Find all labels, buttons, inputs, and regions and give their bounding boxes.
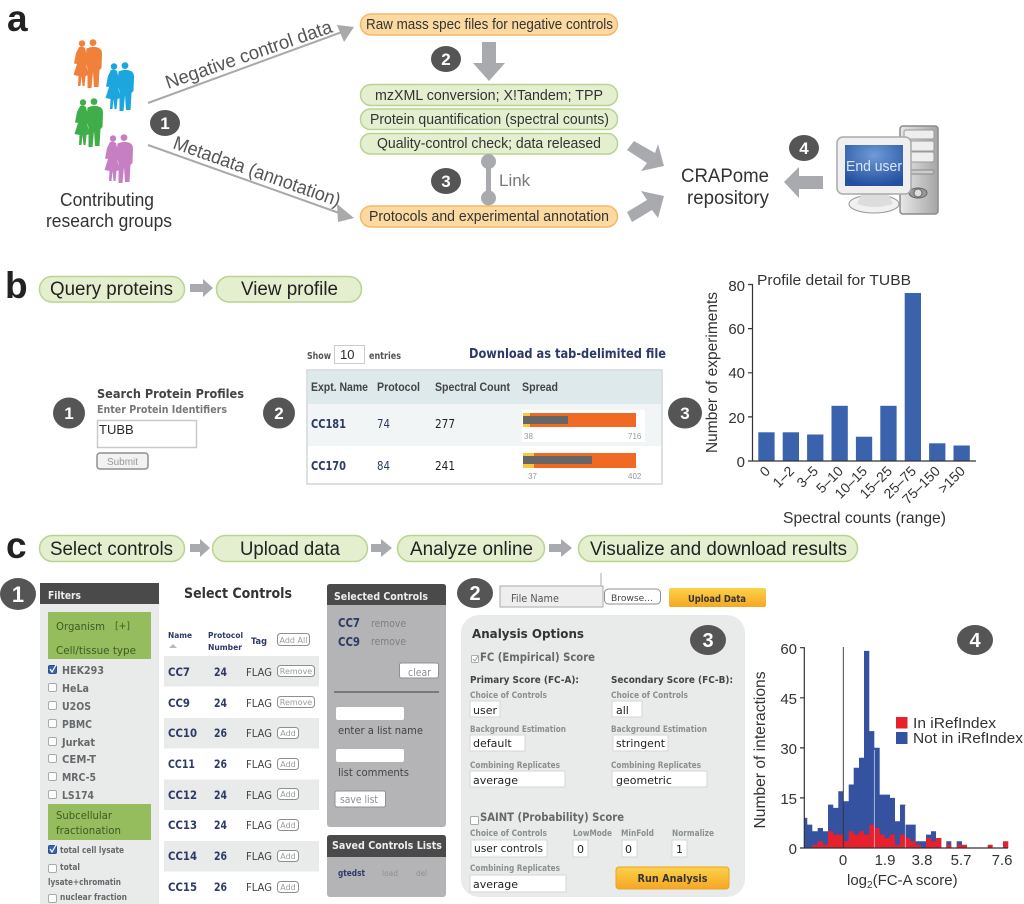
badge 1 bbox=[53, 398, 85, 428]
table: select controls: CC10 bbox=[168, 726, 197, 740]
badge 3 bbox=[668, 398, 702, 428]
panel: analysis options: Choice of Controls bbox=[611, 691, 688, 701]
panel: selected controls: CC7 bbox=[338, 616, 360, 630]
table: select controls: Protocol bbox=[208, 631, 243, 640]
bar chart: profile detail for TUBB: 0 bbox=[756, 463, 773, 480]
panel: analysis options: Combining Replicates bbox=[470, 761, 560, 771]
panel: analysis options: default bbox=[473, 737, 512, 750]
table: select controls: FLAG bbox=[246, 850, 272, 863]
badge 1 bbox=[0, 578, 36, 610]
badge 4: 4 bbox=[799, 139, 809, 158]
results table: CC170 bbox=[311, 459, 346, 473]
badge 2 bbox=[457, 578, 493, 608]
bar chart: profile detail for TUBB bbox=[704, 272, 976, 527]
arrow: metadata annotation: Metadata (annotation) bbox=[170, 133, 343, 211]
table: select controls: 24 bbox=[214, 665, 227, 679]
table: select controls: Name bbox=[168, 631, 193, 640]
histogram: FC-A score distribution bbox=[752, 641, 1024, 891]
table: select controls: 26 bbox=[214, 757, 227, 771]
table: select controls: Add bbox=[280, 821, 296, 830]
table: select controls: FLAG bbox=[246, 758, 272, 771]
pill: upload data bbox=[212, 536, 368, 562]
histogram: FC-A score distribution: 0 bbox=[789, 841, 797, 858]
bar chart: profile detail for TUBB: Number of experiments bbox=[704, 292, 721, 453]
histogram: FC-A score distribution: 60 bbox=[780, 641, 797, 658]
search form: Enter Protein Identifiers bbox=[97, 404, 227, 416]
icon: computer end user bbox=[837, 126, 938, 214]
panel: selected controls: CC9 bbox=[338, 635, 360, 649]
table: select controls: FLAG bbox=[246, 697, 272, 710]
histogram: FC-A score distribution: 7.6 bbox=[992, 852, 1012, 869]
panel: filters: HeLa bbox=[62, 682, 89, 695]
panel: filters: PBMC bbox=[62, 718, 92, 731]
panel: filters bbox=[40, 583, 159, 904]
panel: filters: lysate+chromatin bbox=[48, 878, 121, 888]
bar chart: profile detail for TUBB: 10–15 bbox=[831, 463, 870, 502]
histogram: FC-A score distribution: Not in iRefIndex bbox=[913, 730, 1024, 747]
histogram: FC-A score distribution: 1.9 bbox=[875, 852, 895, 869]
panel: analysis options: Combining Replicates bbox=[470, 864, 560, 874]
badge 4: 4 bbox=[969, 630, 981, 652]
results table: 241 bbox=[435, 459, 455, 473]
bar chart: profile detail for TUBB: 25–75 bbox=[880, 463, 919, 502]
file upload controls bbox=[500, 573, 766, 607]
pill: protocols and experimental annotation: Protocols and experimental annotation bbox=[369, 209, 609, 225]
badge 2 bbox=[431, 46, 461, 72]
table: select controls: 26 bbox=[214, 726, 227, 740]
badge 3: 3 bbox=[680, 404, 690, 423]
panel: analysis options: 0 bbox=[625, 843, 632, 856]
histogram: FC-A score distribution: 45 bbox=[780, 691, 797, 708]
table: select controls bbox=[164, 586, 319, 894]
bar chart: profile detail for TUBB: 0 bbox=[737, 454, 745, 471]
results table: 84 bbox=[377, 459, 390, 473]
bar chart: profile detail for TUBB: >150 bbox=[935, 463, 968, 496]
link connector bbox=[481, 154, 531, 206]
histogram: FC-A score distribution: 2 bbox=[867, 880, 873, 891]
badge 1: 1 bbox=[12, 582, 24, 607]
bar chart: profile detail for TUBB: Spectral counts (range) bbox=[783, 510, 946, 527]
panel: selected controls: remove bbox=[371, 618, 406, 630]
badge 3 bbox=[431, 168, 461, 194]
table: select controls: 24 bbox=[214, 696, 227, 710]
table: select controls: Add bbox=[280, 729, 296, 738]
panel: filters: Jurkat bbox=[61, 736, 95, 749]
panel: saved controls lists bbox=[327, 835, 446, 897]
panel: analysis options: SAINT (Probability) Score bbox=[480, 810, 624, 824]
pill: visualize and download results: Visualize and download results bbox=[590, 539, 847, 560]
icon: contributing research groups silhouettes bbox=[74, 39, 134, 183]
panel: analysis options: Normalize bbox=[672, 829, 714, 839]
table: select controls: 24 bbox=[214, 818, 227, 832]
results table: 38 bbox=[524, 432, 533, 441]
table: select controls: CC13 bbox=[168, 818, 197, 832]
results table: Spread bbox=[522, 382, 558, 394]
label: contributing research groups: research groups bbox=[46, 210, 172, 231]
panel: analysis options: Secondary Score (FC-B): bbox=[611, 675, 733, 686]
search form bbox=[97, 387, 244, 469]
panel: analysis options: stringent bbox=[616, 737, 666, 750]
badge 1: 1 bbox=[160, 114, 170, 133]
panel letter c: c bbox=[6, 525, 27, 566]
panel: saved controls lists: del bbox=[416, 869, 427, 878]
panel: filters: Cell/tissue type bbox=[56, 644, 136, 657]
panel: filters: nuclear fraction bbox=[60, 893, 127, 903]
panel c: analysis workflow bbox=[0, 525, 1024, 904]
file upload controls: Browse... bbox=[611, 594, 653, 604]
pill: view profile: View profile bbox=[241, 279, 338, 300]
pill: view profile bbox=[216, 276, 362, 302]
results table: entries bbox=[369, 351, 401, 362]
table: select controls: 26 bbox=[214, 880, 227, 894]
bar chart: profile detail for TUBB: 60 bbox=[728, 321, 745, 338]
file upload controls: Upload Data bbox=[688, 594, 746, 605]
arrow: query to view bbox=[190, 279, 213, 297]
table: select controls: FLAG bbox=[246, 789, 272, 802]
panel: selected controls: remove bbox=[371, 636, 406, 648]
pill: select controls bbox=[40, 536, 184, 562]
pill: raw mass spec files: Raw mass spec files for negative controls bbox=[366, 17, 613, 33]
panel: selected controls: list comments bbox=[338, 767, 409, 779]
histogram: FC-A score distribution: 30 bbox=[780, 741, 797, 758]
histogram: FC-A score distribution: 5.7 bbox=[951, 852, 971, 869]
arrow: negative control data: Negative control data bbox=[163, 17, 335, 94]
histogram: FC-A score distribution: 3.8 bbox=[912, 852, 932, 869]
panel: filters: LS174 bbox=[62, 789, 94, 802]
results table: 37 bbox=[528, 472, 537, 481]
panel: analysis options: Choice of Controls bbox=[470, 691, 547, 701]
panel: filters: total cell lysate bbox=[60, 846, 124, 856]
results table: 716 bbox=[628, 432, 642, 441]
arrow: select to upload bbox=[190, 539, 210, 557]
table: select controls: Select Controls bbox=[184, 586, 292, 602]
panel: filters: Organism bbox=[56, 620, 105, 633]
table: select controls: FLAG bbox=[246, 819, 272, 832]
table: select controls: 24 bbox=[214, 788, 227, 802]
arrow: analyze to visualize bbox=[549, 539, 572, 557]
panel: analysis options: FC (Empirical) Score bbox=[480, 650, 595, 664]
panel: filters: MRC-5 bbox=[62, 771, 96, 784]
badge 3: 3 bbox=[441, 172, 451, 191]
table: select controls: CC11 bbox=[168, 757, 195, 771]
panel: analysis options: Choice of Controls bbox=[470, 829, 547, 839]
bar chart: profile detail for TUBB: 3–5 bbox=[793, 463, 821, 491]
table: select controls: Add bbox=[280, 760, 296, 769]
panel: analysis options: average bbox=[473, 774, 518, 787]
arrow: end user to repository bbox=[784, 167, 823, 198]
table: select controls: Remove bbox=[280, 698, 312, 707]
histogram: FC-A score distribution: In iRefIndex bbox=[913, 715, 997, 732]
bar chart: profile detail for TUBB: 80 bbox=[728, 278, 745, 295]
results table: Download as tab-delimited file bbox=[469, 347, 666, 362]
results table: 277 bbox=[435, 417, 455, 431]
table: select controls: CC15 bbox=[168, 880, 197, 894]
panel: saved controls lists: Saved Controls Lists bbox=[332, 839, 442, 852]
label: CRAPome repository: repository bbox=[687, 187, 769, 209]
panel: selected controls bbox=[327, 584, 446, 827]
panel: filters: U2OS bbox=[62, 700, 91, 713]
results table: Spectral Count bbox=[435, 382, 510, 394]
panel: filters: fractionation bbox=[56, 824, 121, 837]
bar chart: profile detail for TUBB: Profile detail for TUBB bbox=[757, 272, 911, 289]
histogram: FC-A score distribution: log bbox=[847, 872, 867, 889]
badge 2: 2 bbox=[274, 404, 284, 423]
panel: analysis options bbox=[461, 615, 745, 897]
bar chart: profile detail for TUBB: 40 bbox=[728, 365, 745, 382]
pill: query proteins: Query proteins bbox=[50, 279, 173, 300]
table: select controls: Tag bbox=[251, 637, 267, 647]
panel: filters: CEM-T bbox=[62, 753, 96, 766]
panel: saved controls lists: gtedst bbox=[338, 869, 365, 879]
panel: saved controls lists: load bbox=[382, 869, 398, 878]
table: select controls: CC14 bbox=[168, 849, 197, 863]
panel: filters: [+] bbox=[115, 621, 130, 632]
table: select controls: Add bbox=[280, 883, 296, 892]
table: select controls: FLAG bbox=[246, 727, 272, 740]
table: select controls: Number bbox=[208, 643, 242, 652]
histogram: FC-A score distribution: 15 bbox=[780, 791, 797, 808]
results table: 402 bbox=[628, 472, 642, 481]
table: select controls: FLAG bbox=[246, 881, 272, 894]
panel: analysis options: Background Estimation bbox=[611, 725, 707, 735]
panel: analysis options: all bbox=[616, 704, 629, 717]
table: select controls: CC9 bbox=[168, 696, 190, 710]
search form: Submit bbox=[107, 457, 138, 468]
bar chart: profile detail for TUBB: 15–25 bbox=[856, 463, 895, 502]
badge 4 bbox=[789, 135, 819, 161]
badge 2: 2 bbox=[469, 583, 481, 605]
icon: computer end user: End user bbox=[846, 158, 902, 175]
panel: selected controls: enter a list name bbox=[338, 725, 423, 737]
panel: analysis options: LowMode bbox=[573, 829, 612, 839]
pill: quality-control check: Quality-control check; data released bbox=[377, 136, 601, 152]
panel: analysis options: user bbox=[473, 704, 497, 717]
table: select controls: Add bbox=[280, 852, 296, 861]
label: contributing research groups: Contributing bbox=[60, 189, 154, 210]
pill: select controls: Select controls bbox=[50, 539, 173, 560]
pill: analyze online: Analyze online bbox=[410, 539, 533, 560]
search form: Search Protein Profiles bbox=[97, 387, 244, 401]
results table: Protocol bbox=[377, 382, 420, 394]
link connector: Link bbox=[499, 171, 531, 190]
arrow: processing down arrow bbox=[473, 42, 505, 81]
arrow: upload to analyze bbox=[371, 539, 392, 557]
pill: protein quantification: Protein quantification (spectral counts) bbox=[370, 112, 609, 128]
table: select controls: Remove bbox=[280, 667, 312, 676]
table: select controls: FLAG bbox=[246, 666, 272, 679]
pill: upload data: Upload data bbox=[240, 539, 340, 560]
results table: Expt. Name bbox=[311, 382, 368, 394]
panel: filters: Subcellular bbox=[56, 809, 112, 822]
badge 1 bbox=[150, 110, 180, 136]
histogram: FC-A score distribution: 0 bbox=[839, 852, 847, 869]
results table bbox=[307, 346, 666, 484]
badge 4 bbox=[957, 625, 993, 655]
panel: analysis options: average bbox=[473, 878, 518, 891]
badge 3 bbox=[690, 625, 726, 655]
panel letter b: b bbox=[5, 265, 28, 306]
badge 2 bbox=[263, 398, 295, 428]
panel: analysis options: Run Analysis bbox=[638, 873, 708, 885]
panel: filters: total bbox=[60, 863, 80, 873]
panel: selected controls: clear bbox=[408, 667, 432, 679]
histogram: FC-A score distribution: (FC-A score) bbox=[873, 872, 958, 889]
table: select controls: Add All bbox=[280, 636, 307, 645]
pill: mzXML conversion bbox=[360, 84, 618, 106]
panel a: data submission workflow bbox=[7, 0, 938, 231]
file upload controls: File Name bbox=[511, 593, 559, 605]
table: select controls: CC7 bbox=[168, 665, 190, 679]
table: select controls: 26 bbox=[214, 849, 227, 863]
panel: analysis options: Combining Replicates bbox=[611, 761, 701, 771]
panel: analysis options: Primary Score (FC-A): bbox=[470, 675, 579, 686]
panel: analysis options: Analysis Options bbox=[472, 626, 584, 641]
panel: filters: HEK293 bbox=[62, 664, 104, 677]
panel: analysis options: geometric bbox=[616, 774, 672, 787]
results table: Show bbox=[307, 351, 331, 362]
panel: filters: Filters bbox=[48, 590, 81, 602]
panel: analysis options: 1 bbox=[676, 843, 683, 856]
panel: selected controls: Selected Controls bbox=[334, 590, 428, 603]
table: select controls: CC12 bbox=[168, 788, 197, 802]
panel: analysis options: 0 bbox=[577, 843, 584, 856]
badge 3: 3 bbox=[702, 630, 714, 652]
bar chart: profile detail for TUBB: 5–10 bbox=[813, 463, 846, 496]
results table: CC181 bbox=[311, 417, 346, 431]
bar chart: profile detail for TUBB: 20 bbox=[728, 410, 745, 427]
results table: 10 bbox=[340, 347, 354, 362]
table: select controls: Add bbox=[280, 790, 296, 799]
bar chart: profile detail for TUBB: 75–150 bbox=[899, 463, 943, 507]
badge 2: 2 bbox=[441, 50, 451, 69]
results table: 74 bbox=[377, 417, 390, 431]
histogram: FC-A score distribution: Number of interactions bbox=[752, 671, 769, 828]
arrow: annotation to repository bbox=[627, 191, 664, 222]
label: CRAPome repository: CRAPome bbox=[681, 165, 769, 187]
panel: selected controls: save list bbox=[340, 794, 378, 806]
badge 1: 1 bbox=[64, 404, 74, 423]
pill: mzXML conversion: mzXML conversion; X!Tandem; TPP bbox=[375, 88, 603, 104]
pill: analyze online bbox=[398, 536, 544, 562]
search form: TUBB bbox=[99, 422, 134, 437]
panel: analysis options: Background Estimation bbox=[470, 725, 566, 735]
panel: analysis options: user controls bbox=[474, 842, 543, 855]
bar chart: profile detail for TUBB: 1–2 bbox=[769, 463, 797, 491]
arrow: processed data to repository bbox=[627, 141, 664, 171]
panel: analysis options: MinFold bbox=[621, 829, 654, 839]
panel b: query workflow bbox=[5, 265, 976, 527]
